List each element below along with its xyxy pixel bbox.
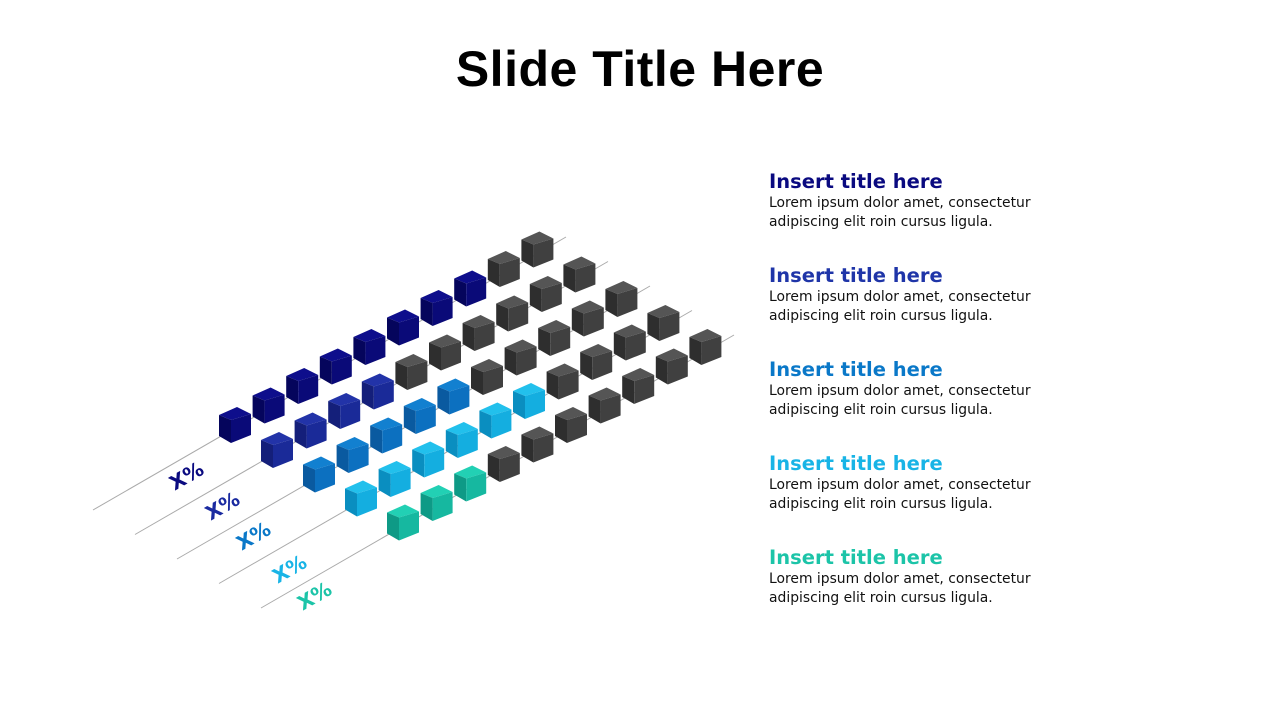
row 3 cubes: [303, 281, 637, 492]
row 1 cubes: [219, 232, 553, 443]
text block 3: Lorem ipsum dolor amet, consectetur: [769, 383, 1031, 399]
text block 4: adipiscing elit roin cursus ligula.: [769, 496, 993, 512]
row 4 cubes: [345, 305, 679, 516]
title: Slide Title Here: [456, 41, 824, 97]
label: row 4 percent: X%: [268, 550, 311, 588]
text block 3: [769, 358, 1031, 418]
text block 2: Lorem ipsum dolor amet, consectetur: [769, 289, 1031, 305]
row 2 cubes: [261, 256, 595, 468]
text block 5: Insert title here: [769, 546, 943, 569]
text block 4: Lorem ipsum dolor amet, consectetur: [769, 477, 1031, 493]
text block 4: Insert title here: [769, 452, 943, 475]
label: row 1 percent: X%: [165, 457, 208, 495]
text block 2: adipiscing elit roin cursus ligula.: [769, 308, 993, 324]
text block 2: [769, 264, 1031, 324]
label: row 2 percent: X%: [201, 487, 244, 525]
text block 3: adipiscing elit roin cursus ligula.: [769, 402, 993, 418]
text block 5: adipiscing elit roin cursus ligula.: [769, 590, 993, 606]
text block 4: [769, 452, 1031, 512]
label: row 3 percent: X%: [232, 517, 275, 555]
row 5 cubes: [387, 329, 721, 540]
text block 1: Insert title here: [769, 170, 943, 193]
text block 1: Lorem ipsum dolor amet, consectetur: [769, 195, 1031, 211]
text block 1: [769, 170, 1031, 230]
text block 1: adipiscing elit roin cursus ligula.: [769, 214, 993, 230]
text block 2: Insert title here: [769, 264, 943, 287]
label: row 5 percent: X%: [293, 577, 336, 615]
text block 3: Insert title here: [769, 358, 943, 381]
text block 5: [769, 546, 1031, 606]
text block 5: Lorem ipsum dolor amet, consectetur: [769, 571, 1031, 587]
